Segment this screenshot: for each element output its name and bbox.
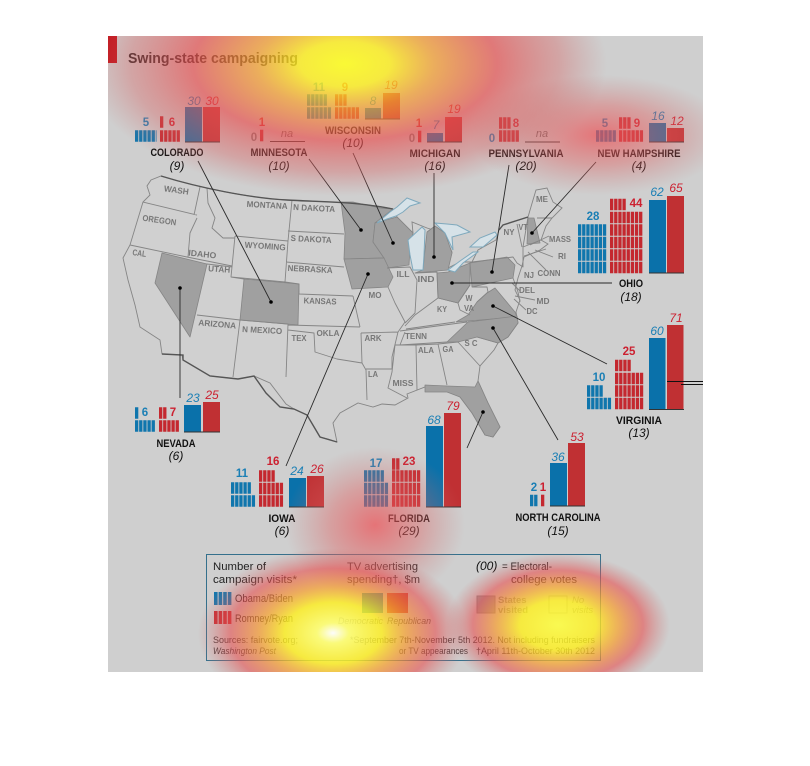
state labels: TENN [405, 331, 427, 341]
state labels: ILL [396, 269, 410, 279]
state boundaries [130, 187, 552, 400]
panel: North Carolina: 2 [531, 482, 537, 494]
map of the United States [123, 176, 571, 442]
panel: Pennsylvania: 0 [489, 133, 495, 145]
panel: Pennsylvania: PENNSYLVANIA [488, 148, 564, 160]
panel: Colorado: (9) [170, 159, 184, 173]
state labels: MO [368, 290, 382, 300]
legend: campaign visits: Romney/Ryan [235, 613, 293, 625]
panel: Minnesota [250, 117, 308, 173]
state labels: MONTANA [246, 199, 288, 211]
panel: North Carolina: 53 [570, 430, 584, 444]
panel: North Carolina: (15) [547, 524, 569, 538]
state labels: GA [442, 344, 454, 354]
panel: Iowa: 24 [289, 464, 304, 478]
panel: Virginia: VIRGINIA [616, 415, 662, 427]
border with Canada and Mexico [161, 176, 528, 442]
panel: Ohio [578, 181, 684, 304]
panel: Wisconsin: WISCONSIN [325, 125, 381, 137]
panel: Nevada [135, 388, 220, 463]
state labels: ARK [364, 333, 382, 343]
state labels: IND [418, 274, 434, 284]
panel: Florida: 79 [446, 399, 460, 413]
panel: New Hampshire: NEW HAMPSHIRE [598, 148, 680, 160]
state labels: NEBRASKA [287, 263, 333, 275]
state labels: VA [464, 303, 474, 313]
legend: electoral votes and state shading: No [572, 595, 584, 606]
panel: Colorado: 6 [169, 117, 175, 129]
legend [206, 554, 600, 660]
panel: Florida: (29) [398, 524, 420, 538]
legend: electoral votes and state shading: visits [572, 605, 593, 616]
state labels: MASS [549, 234, 571, 244]
panel: New Hampshire [596, 109, 684, 173]
panel: Minnesota: 0 [251, 132, 257, 144]
state labels: MD [536, 296, 550, 306]
panel: Nevada: 23 [185, 391, 200, 405]
panel: Nevada: NEVADA [156, 438, 196, 450]
state labels: MISS [392, 378, 414, 388]
state labels: ME [536, 194, 548, 204]
attention heatmap overlay [108, 36, 703, 672]
panel: Iowa: IOWA [268, 513, 296, 525]
panel: Wisconsin: 9 [342, 82, 348, 94]
panel: Nevada: (6) [169, 449, 183, 463]
leader lines from state labels to map dots [178, 153, 612, 466]
legend: TV spending: Democratic [338, 616, 383, 627]
panel: Pennsylvania [488, 118, 564, 173]
state labels: NY [504, 227, 515, 237]
panel: Virginia [587, 311, 703, 440]
legend: electoral votes and state shading: college votes [511, 574, 578, 586]
panel: Iowa: 26 [309, 462, 324, 476]
state labels: UTAH [208, 263, 231, 275]
panel: Pennsylvania: na [536, 128, 548, 140]
panel: Wisconsin [307, 78, 400, 150]
state labels: N MEXICO [242, 324, 283, 336]
state labels: ALA [418, 345, 434, 355]
panel: North Carolina: 1 [540, 482, 547, 494]
state labels: N DAKOTA [293, 202, 335, 214]
panel: Michigan: 7 [433, 118, 441, 132]
panel: North Carolina: NORTH CAROLINA [516, 512, 601, 524]
panel: Ohio: 28 [587, 211, 600, 223]
panel: Colorado: 30 [187, 94, 201, 108]
panel: background [108, 36, 703, 672]
state labels: DC [526, 306, 538, 316]
panel: Colorado: 30 [205, 94, 219, 108]
panel: New Hampshire: 16 [651, 109, 665, 123]
legend: sources and notes: †April 11th-October 30th 2012 [476, 646, 595, 656]
legend: electoral votes and state shading: (00) [476, 559, 497, 573]
panel: Minnesota: MINNESOTA [250, 147, 308, 159]
panel: Ohio: (18) [620, 290, 642, 304]
state labels: KANSAS [303, 295, 337, 307]
panel: Iowa: (6) [275, 524, 289, 538]
state labels: S C [464, 338, 478, 348]
panel: Virginia: 60 [650, 324, 664, 338]
panel: Florida: 23 [403, 456, 415, 468]
panel: Florida: 17 [370, 458, 382, 470]
panel: New Hampshire: (4) [632, 159, 646, 173]
legend: sources and notes: Washington Post [213, 646, 277, 656]
state labels: WASH [163, 183, 189, 197]
panel: North Carolina [516, 430, 601, 538]
panel: Iowa: 16 [267, 456, 279, 468]
state labels: KY [437, 304, 447, 314]
legend: TV spending: Republican [387, 616, 431, 627]
state labels: CAL [132, 247, 147, 259]
panel: Michigan [409, 102, 462, 173]
panel: Virginia: 25 [623, 346, 636, 358]
legend: electoral votes and state shading: States [498, 595, 527, 606]
legend: electoral votes and state shading: visited [498, 605, 528, 616]
title: Swing-state campaigning [128, 50, 298, 67]
panel: Minnesota: 1 [259, 117, 266, 129]
state labels: VT [518, 222, 528, 232]
panel: Nevada: 6 [142, 407, 148, 419]
legend: sources and notes: Sources: fairvote.org; [213, 635, 298, 645]
legend: campaign visits [213, 561, 298, 625]
state labels [132, 183, 571, 388]
panel: Ohio: 65 [669, 181, 683, 195]
panel: Wisconsin: 8 [370, 94, 377, 108]
legend: electoral votes and state shading: = Electoral- [502, 561, 552, 573]
panel: Florida [364, 399, 461, 538]
panel: Florida: FLORIDA [388, 513, 430, 525]
panel: Minnesota: na [281, 128, 293, 140]
panel: Colorado: COLORADO [150, 147, 204, 159]
legend: sources and notes: *September 7th-November 5th 2012. Not including fundraisers [350, 635, 596, 645]
panel: Florida: 68 [427, 413, 441, 427]
panel: Minnesota: (10) [268, 159, 290, 173]
legend: campaign visits: Obama/Biden [235, 593, 293, 605]
state labels: CONN [538, 268, 560, 278]
panel: Iowa [231, 456, 324, 538]
legend: campaign visits: campaign visits* [213, 574, 298, 586]
legend: TV spending: spending†, $m [347, 574, 420, 586]
panel: Ohio: 44 [630, 198, 643, 210]
panel: New Hampshire: 9 [634, 118, 640, 130]
panel: Wisconsin: 11 [313, 82, 326, 94]
legend: sources and notes: or TV appearances [399, 646, 469, 656]
legend: TV spending: TV advertising [347, 561, 418, 573]
title [108, 36, 298, 67]
panel: Michigan: (16) [424, 159, 446, 173]
legend: TV spending [338, 561, 431, 627]
Great Lakes [377, 198, 497, 272]
panel: Virginia: 71 [669, 311, 683, 325]
state labels: LA [368, 369, 378, 379]
state labels: WYOMING [244, 240, 286, 252]
state labels: RI [558, 251, 566, 261]
panel: Ohio: OHIO [619, 278, 643, 290]
panel: Pennsylvania: 8 [513, 118, 520, 130]
panel: Virginia: 10 [593, 372, 605, 384]
legend: electoral votes and state shading [476, 559, 593, 616]
panel: Virginia: (13) [628, 426, 650, 440]
panel: Nevada: 7 [170, 407, 176, 419]
state labels: NJ [524, 270, 534, 280]
panel: New Hampshire: 5 [602, 118, 609, 130]
panel: Michigan: 1 [416, 118, 423, 130]
state labels: TEX [292, 333, 307, 343]
panel: Michigan: 19 [447, 102, 461, 116]
state labels: IDAHO [188, 248, 217, 260]
panel: New Hampshire: 12 [670, 114, 684, 128]
state labels: OKLA [316, 328, 340, 338]
panel: Wisconsin: 19 [384, 78, 398, 92]
state labels: OREGON [142, 213, 177, 227]
panel: Iowa: 11 [236, 468, 249, 480]
legend: campaign visits: Number of [213, 561, 267, 573]
panel: Nevada: 25 [204, 388, 219, 402]
state labels: S DAKOTA [290, 233, 332, 245]
state labels: DEL [519, 285, 535, 295]
state labels: ARIZONA [198, 317, 237, 331]
panel: Michigan: MICHIGAN [410, 148, 461, 160]
panel: Wisconsin: (10) [342, 136, 364, 150]
panel: North Carolina: 36 [551, 450, 565, 464]
panel: Ohio: 62 [650, 185, 664, 199]
panel: Colorado [135, 94, 220, 173]
panel: Pennsylvania: (20) [515, 159, 537, 173]
shaded swing states [155, 202, 540, 437]
panel: Michigan: 0 [409, 133, 415, 145]
legend: sources and notes [213, 635, 596, 656]
panel: Colorado: 5 [143, 117, 150, 129]
state labels: W [466, 293, 473, 303]
